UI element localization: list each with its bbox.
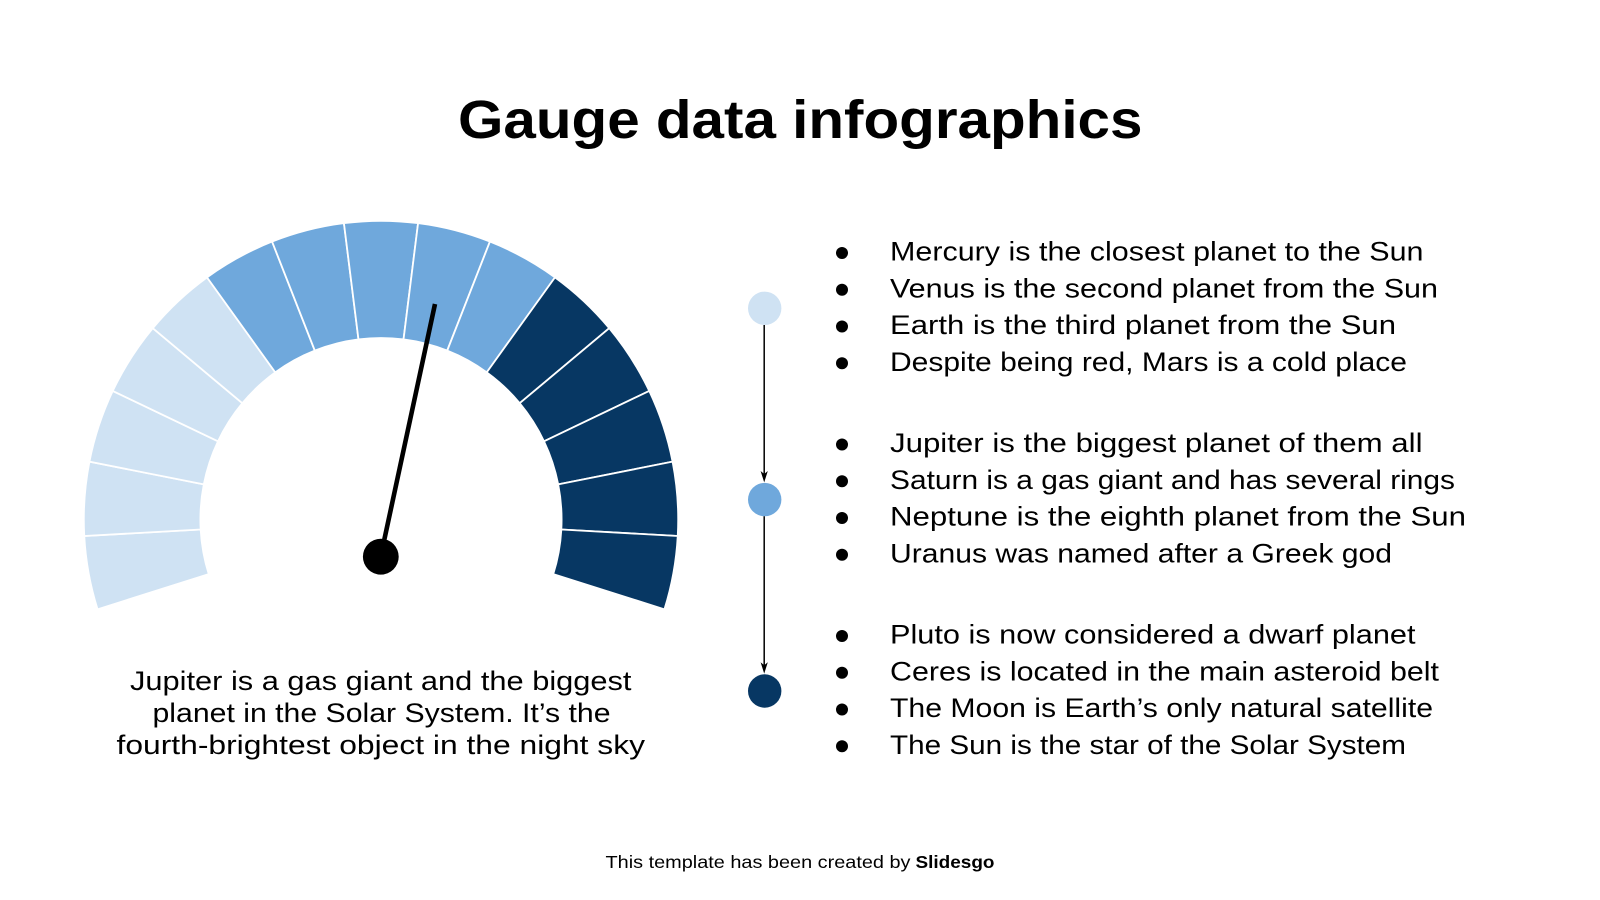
gauge description: fourth-brightest object in the night sky [116,730,646,760]
list: other bodies: Ceres is located in the main asteroid belt [890,656,1440,686]
footer credit [606,852,994,872]
list: inner planets [836,237,1438,377]
circle: dark marker [748,674,781,708]
list: other bodies [836,620,1440,760]
gauge band: light segments [82,276,286,610]
list: outer planets: Neptune is the eighth planet from the Sun [890,502,1466,532]
gauge description: planet in the Solar System. It’s the [152,698,610,728]
list: other bodies: Pluto is now considered a dwarf planet [890,620,1416,650]
timeline connector [748,292,781,708]
arrow: medium to dark [761,516,768,674]
list: outer planets: Jupiter is the biggest planet of them all [890,428,1422,458]
gauge chart [82,221,680,610]
footer credit: This template has been created by [606,852,911,872]
list: other bodies: The Moon is Earth’s only natural satellite [890,693,1433,723]
gauge description [116,666,646,760]
circle: light marker [748,292,781,325]
title: Gauge data infographics [458,90,1142,150]
arrow: light to medium [761,325,768,482]
gauge band: medium segments [206,221,556,379]
list: outer planets: Uranus was named after a Greek god [890,538,1392,568]
circle: medium marker [748,483,781,516]
list: inner planets: Despite being red, Mars is a cold place [890,347,1407,377]
footer credit: Slidesgo [916,852,994,872]
gauge band: dark segments [476,276,680,610]
list: outer planets: Saturn is a gas giant and has several rings [890,465,1455,495]
list: inner planets: Earth is the third planet from the Sun [890,310,1396,340]
list: outer planets [836,428,1466,568]
gauge needle [363,304,435,575]
list: other bodies: The Sun is the star of the Solar System [890,730,1406,760]
gauge description: Jupiter is a gas giant and the biggest [130,666,632,696]
list: inner planets: Venus is the second planet from the Sun [890,274,1438,304]
list: inner planets: Mercury is the closest planet to the Sun [890,237,1424,267]
